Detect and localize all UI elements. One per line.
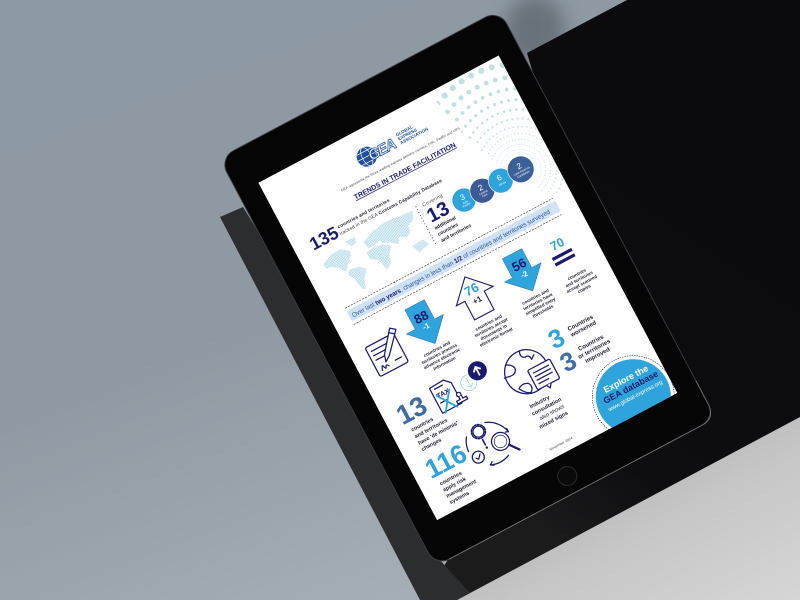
arrow: 88 down: 88 (411, 307, 431, 327)
label: documents in electronic format: electronic format (479, 326, 514, 348)
bubble: Africa: 6 (495, 173, 504, 183)
stat: 116 risk management (426, 445, 477, 504)
decorative dot fan (436, 62, 569, 194)
stat: 3 countries worsened: worsened (569, 320, 598, 339)
stat: 3 countries improved: Countries (578, 334, 606, 353)
icon: tax document (428, 380, 468, 414)
callout: explore the database (592, 355, 675, 430)
label: accept scanned copies: accept scanned (566, 274, 598, 294)
arrow: 56 down: -2 (519, 269, 529, 280)
stat: covering 13 additional (422, 194, 472, 242)
stat: covering 13 additional: countries (437, 222, 460, 238)
date: November 2024 (549, 436, 573, 452)
icon: tax document: TAX (436, 388, 451, 400)
region bubbles (452, 156, 534, 212)
icon: globe with document (504, 349, 560, 394)
stat: 135 countries tracked: countries and territories (337, 198, 391, 229)
bubble: Latin America Caribbean: Caribbean (516, 169, 531, 179)
stat: 3 countries improved: 3 (555, 345, 581, 378)
highlight band: Over last two years, changes in less than 1/2 of countries and territories surveyed (351, 209, 552, 319)
bubble: Latin America Caribbean (507, 156, 534, 183)
bubble: Africa: Africa (498, 180, 507, 187)
label: documents in electronic format (474, 314, 513, 346)
arrow: 56 down: 56 (509, 255, 529, 275)
stat: 135 countries tracked: tracked in the GEA Customs Capability Database (339, 178, 443, 236)
logo globe (356, 146, 377, 167)
label: simplified entry thresholds: simplified entry (525, 296, 557, 316)
label: simplified entry thresholds: countries and (521, 288, 550, 306)
bubble: Latin America Caribbean: Latin America (513, 165, 531, 177)
label: industry consultation: mixed signs (538, 410, 569, 431)
stat: covering 13 additional: Covering (421, 193, 444, 209)
stat: 13 de minimis: 13 (391, 390, 432, 431)
bubble: Latin America Caribbean: 2 (515, 161, 524, 171)
label: simplified entry thresholds (522, 288, 556, 318)
stat: 13 de minimis: countries (410, 417, 435, 433)
title: TRENDS IN TRADE FACILITATION (353, 142, 457, 201)
bubble: Central Asia: Central (478, 188, 489, 197)
stat: 116 risk management: countries (439, 471, 463, 487)
stat: 135 countries tracked: 135 (306, 223, 342, 254)
label: industry consultation: consultation (531, 397, 563, 418)
stat: 3 countries improved: improved (584, 347, 611, 365)
label: documents in electronic format: countries and (474, 313, 503, 332)
stat: 13 de minimis: and territories (414, 418, 449, 440)
bubble: Asia Pacific: 3 (459, 192, 467, 202)
label: industry consultation: Industry (529, 394, 552, 410)
icon: upward arrow circle (468, 361, 487, 380)
label: accept scanned copies: and territories (565, 270, 594, 288)
bubble: Central Asia: 2 (477, 182, 485, 193)
notebook under tablet (220, 0, 800, 600)
bubble: Asia Pacific: Asia (462, 199, 469, 205)
stat: 3 countries improved: or territories (577, 338, 612, 361)
screen (258, 56, 678, 520)
label: simplified entry thresholds: thresholds (532, 303, 555, 319)
label: advance electronic information: territories process (421, 342, 458, 365)
label: industry consultation (529, 396, 568, 429)
stat: 116 risk management: apply risk (442, 476, 467, 493)
label: simplified entry thresholds: territories have (522, 292, 554, 311)
callout: explore the database: Explore the (602, 363, 650, 395)
logo (356, 126, 428, 167)
label: documents in electronic format: documents in (480, 323, 508, 341)
stat: covering 13 additional: and territories (440, 223, 473, 244)
bubble: Asia Pacific: Pacific (462, 201, 472, 209)
logo wordmark: EXPRESS (397, 127, 418, 141)
bubble: Central Asia: Asia (481, 192, 488, 198)
bubble: Central Asia (470, 178, 494, 204)
stat: 13 de minimis: have 'de minimis' (417, 421, 459, 447)
stat: 13 de minimis: changes (421, 437, 443, 453)
light surface lower right (440, 410, 800, 600)
bubble: Asia Pacific (452, 188, 476, 212)
dotted world map (323, 211, 429, 290)
stat: 70 equal sign: 70 (548, 235, 567, 254)
logo letters: GEA (365, 135, 400, 164)
stat: covering 13 additional: additional (434, 215, 458, 232)
stat: 3 countries improved (560, 336, 610, 371)
stat: 70 equal sign (550, 238, 576, 266)
arrow: 88 down (404, 299, 444, 344)
tablet body (219, 10, 716, 566)
icon: downward arrow circle (460, 374, 478, 392)
stat: 3 countries worsened (548, 316, 596, 348)
label: industry consultation: also shows (539, 404, 566, 422)
label: advance electronic information: information (432, 355, 457, 371)
home button (554, 463, 580, 489)
tablet shadow (505, 0, 565, 64)
stat: 13 de minimis (397, 397, 458, 451)
icon: risk management (466, 422, 521, 466)
stat: 116 risk management: 116 (420, 438, 472, 485)
arrow: 88 down: -1 (421, 321, 431, 332)
stat: 116 risk management: management (445, 479, 478, 500)
arrow: 56 down (502, 248, 542, 292)
tagline: GEA represents the three leading express delivery carriers: DHL, FedEx and UPS (340, 126, 461, 193)
label: documents in electronic format: territories accept (474, 317, 509, 338)
stat: covering 13 additional: 13 (423, 198, 453, 227)
stat: 116 risk management: systems (449, 490, 471, 506)
label: advance electronic information: countries and (423, 340, 451, 358)
arrow: 76 up: +1 (471, 294, 484, 307)
label: accept scanned copies: countries (567, 267, 587, 281)
arrow: 76 up (456, 276, 495, 321)
callout: explore the database: www.global-express.org (607, 380, 664, 414)
bubble: Africa (488, 168, 513, 193)
label: accept scanned copies: copies (577, 283, 592, 294)
stat: 135 countries tracked (310, 180, 442, 250)
label: advance electronic information: advance electronic (423, 347, 461, 370)
tablet (224, 14, 712, 562)
logo wordmark: GLOBAL (395, 124, 414, 137)
logo wordmark: ASSOCIATION (399, 126, 429, 145)
stat: 3 countries worsened: Countries (567, 314, 595, 333)
callout: explore the database: GEA database (602, 369, 660, 406)
stat: 3 countries worsened: 3 (543, 322, 570, 355)
icon: document and pen (365, 328, 408, 377)
arrow: 76 up: 76 (462, 279, 481, 299)
